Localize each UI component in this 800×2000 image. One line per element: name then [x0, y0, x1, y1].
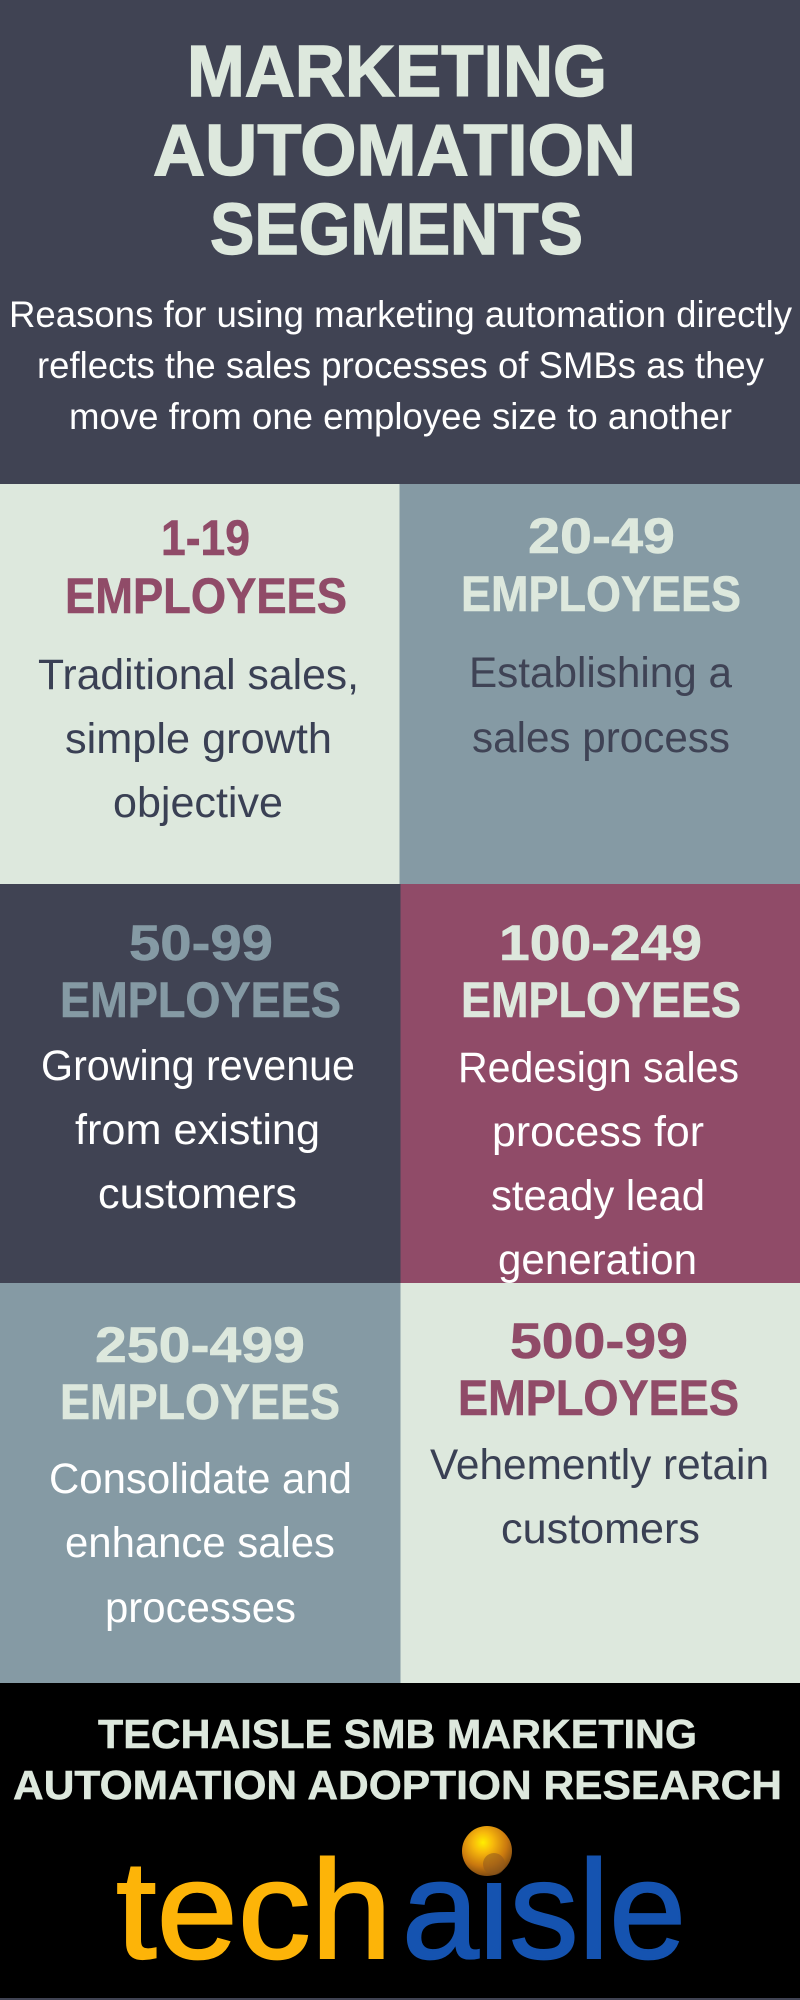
heading: 20-49 employees [461, 508, 741, 622]
footer heading: TECHAISLE SMB MARKETING [98, 1711, 697, 1757]
text: establishing a sales process: Establishing a [469, 649, 732, 697]
heading: 100-249 employees: 100-249 [499, 915, 702, 971]
panel: footer [0, 1683, 800, 2000]
text: growing revenue [41, 1042, 355, 1218]
text: vehemently retain customers: customers [501, 1505, 700, 1553]
text: establishing a sales process [469, 649, 732, 762]
subtitle text: move from one employee size to another [69, 396, 732, 437]
title: SEGMENTS [210, 190, 583, 270]
text: redesign sales process: Redesign sales [458, 1044, 739, 1092]
footer heading: AUTOMATION ADOPTION RESEARCH [13, 1762, 782, 1808]
heading: 100-249 employees: EMPLOYEES [461, 972, 741, 1028]
panel: header [0, 0, 800, 484]
panel: 1-19 employees [0, 484, 400, 884]
panel: 20-49 employees [400, 484, 800, 884]
subtitle text: Reasons for using marketing automation directly [9, 294, 792, 335]
text: traditional sales [38, 651, 359, 827]
text: growing revenue: customers [98, 1170, 297, 1218]
text: traditional sales: objective [113, 779, 283, 827]
heading: 250-499 employees: 250-499 [95, 1317, 305, 1373]
heading: 100-249 employees [461, 915, 741, 1028]
text: redesign sales process: generation [498, 1236, 697, 1284]
text: vehemently retain customers [430, 1441, 769, 1553]
title: AUTOMATION [153, 111, 636, 191]
text: growing revenue: Growing revenue [41, 1042, 355, 1090]
text: vehemently retain customers: Vehemently retain [430, 1441, 769, 1489]
heading: 20-49 employees: 20-49 [528, 508, 675, 564]
heading: 1-19 employees: 1-19 [161, 510, 250, 566]
logo: techaisle: aisle [402, 1831, 686, 1988]
heading: 50-99 employees [60, 915, 341, 1028]
panel: 500-99 employees [400, 1283, 800, 1683]
title [153, 32, 636, 270]
logo: techaisle [116, 1826, 686, 1988]
heading: 1-19 employees: EMPLOYEES [65, 568, 347, 624]
subtitle text: reflects the sales processes of SMBs as they [37, 345, 764, 386]
footer heading [13, 1711, 782, 1808]
text: consolidate and enhance: enhance sales [65, 1519, 335, 1567]
text: redesign sales process: steady lead [491, 1172, 705, 1220]
text: traditional sales: Traditional sales, [38, 651, 359, 699]
text: consolidate and enhance: processes [105, 1584, 296, 1632]
text: consolidate and enhance [49, 1455, 352, 1632]
logo: techaisle: tech [116, 1831, 392, 1988]
title: MARKETING [187, 32, 607, 112]
text: growing revenue: from existing [75, 1106, 320, 1154]
panel: 100-249 employees [400, 884, 800, 1284]
text: redesign sales process: process for [492, 1108, 704, 1156]
heading: 1-19 employees [65, 510, 347, 624]
heading: 500-99 employees: 500-99 [510, 1313, 688, 1369]
subtitle text [9, 294, 792, 437]
panel: 50-99 employees [0, 884, 401, 1283]
heading: 500-99 employees: EMPLOYEES [458, 1370, 739, 1426]
heading: 50-99 employees: EMPLOYEES [60, 972, 341, 1028]
text: redesign sales process [458, 1044, 739, 1284]
text: traditional sales: simple growth [65, 715, 332, 763]
heading: 500-99 employees [458, 1313, 739, 1426]
heading: 250-499 employees [60, 1317, 340, 1430]
heading: 50-99 employees: 50-99 [129, 915, 273, 971]
panel: 250-499 employees [0, 1283, 401, 1683]
text: consolidate and enhance: Consolidate and [49, 1455, 352, 1503]
text: establishing a sales process: sales process [472, 714, 730, 762]
heading: 250-499 employees: EMPLOYEES [60, 1374, 340, 1430]
heading: 20-49 employees: EMPLOYEES [461, 566, 741, 622]
